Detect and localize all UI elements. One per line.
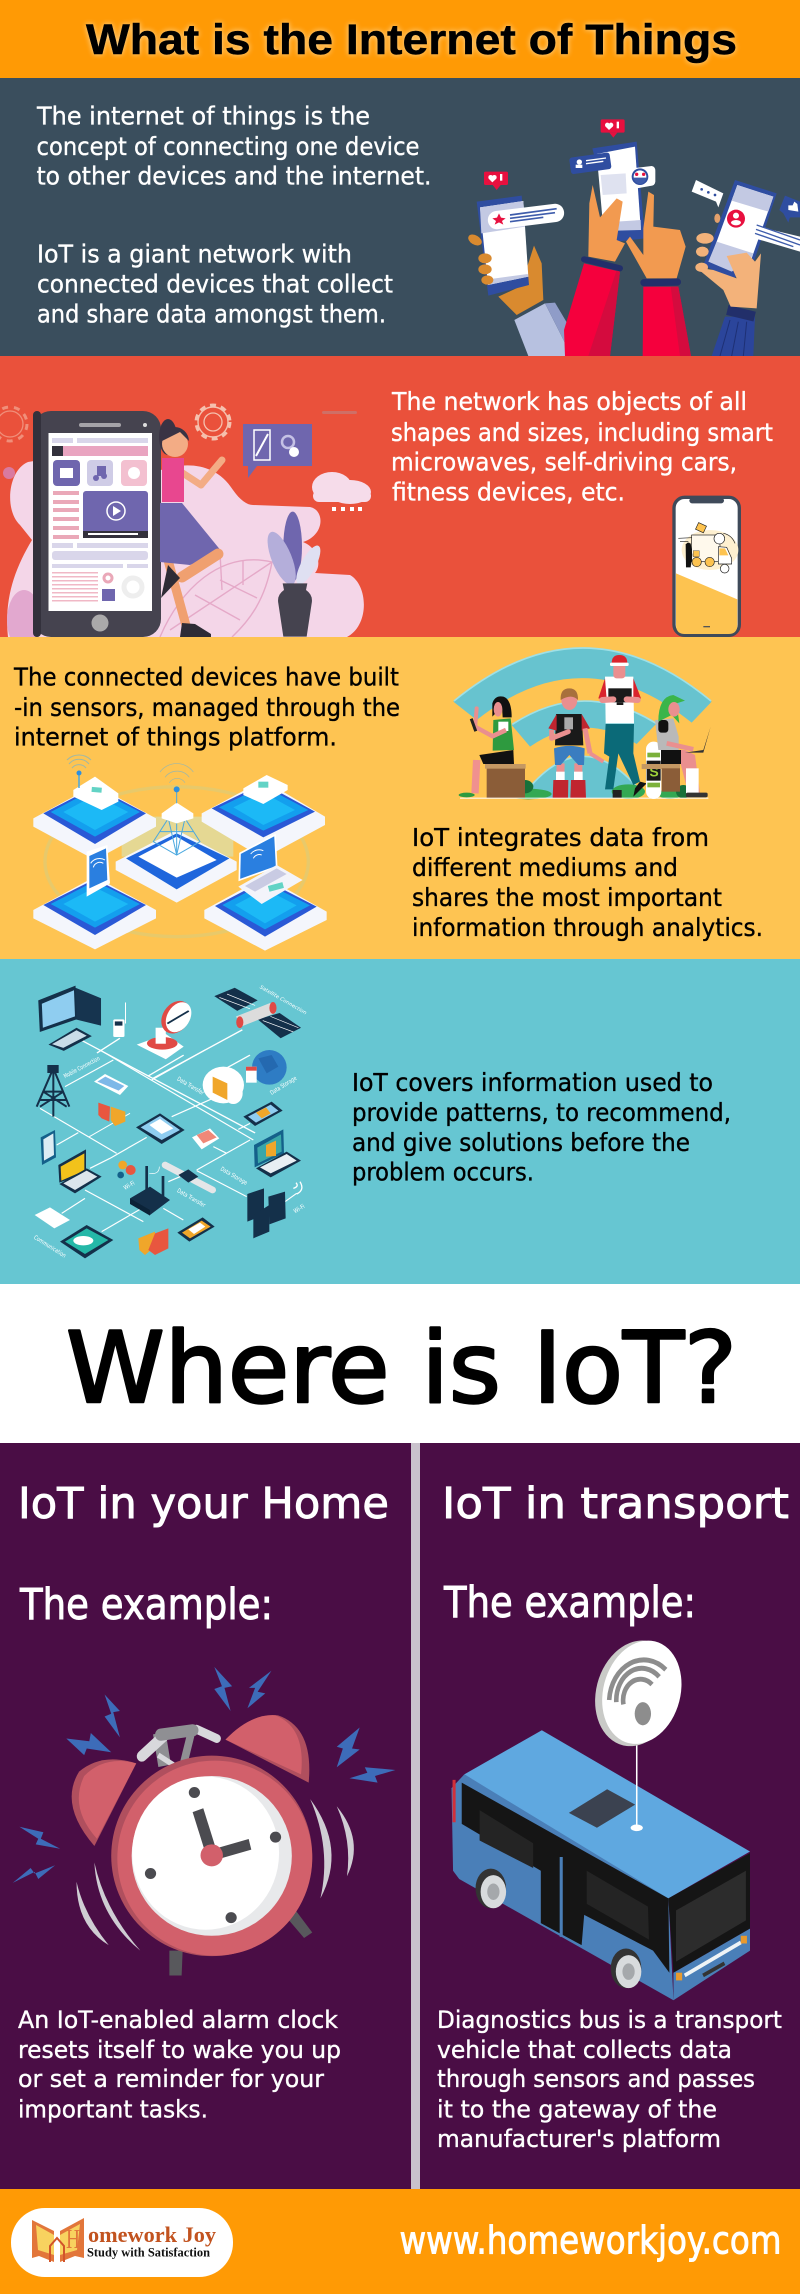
panel: sensors and analytics [0,637,800,959]
text block: network objects: The network has objects of all [391,387,747,416]
standing boy with tablet [598,655,647,798]
seated boy with phone [548,688,603,798]
text block: IoT concept: and share data amongst them. [37,300,386,328]
clock face [111,1756,312,1956]
pink blobs [7,460,364,637]
desktop computer [38,986,101,1051]
potted plant [262,512,325,637]
envelope [35,1207,70,1228]
illustration: people on wifi symbol [453,648,712,799]
phone with contact [94,1074,128,1095]
top heart bubble [601,119,625,138]
smartwatch [165,1165,213,1190]
small phone right [243,1102,283,1126]
bus body [452,1730,750,2000]
platform top right [202,775,325,858]
icon: open book house: H [66,2224,80,2254]
lightning bolts [13,1667,395,1883]
satellite [214,988,301,1038]
router [130,1166,170,1216]
platform bottom left [33,877,156,949]
text block: alarm clock: An IoT-enabled alarm clock [18,2006,338,2034]
wifi router [113,1002,126,1037]
text block: IoT concept: connected devices that collect [37,270,393,298]
illustration: hands holding phones [466,119,800,356]
wifi symbols [91,850,263,867]
wheels [476,1869,641,1988]
text block: diagnostics bus: vehicle that collects data [437,2036,732,2064]
connection lines [40,1050,297,1232]
text block: alarm clock: or set a reminder for your [18,2065,324,2093]
illustration: ringing alarm clock [13,1667,395,1975]
handle and bells [72,1715,309,1846]
laptop device [238,835,303,904]
phone bottom [177,1217,215,1242]
column headings [18,1479,789,1630]
text block: IoT concept: The internet of things is the [36,102,370,130]
cloud with folder [203,1067,244,1104]
chat bubbles orange [138,1228,168,1255]
tower [37,1066,69,1117]
vibration arcs [77,1799,354,1951]
small labels: Data Transfer [176,1076,205,1097]
tablet [136,1113,185,1144]
header bar [0,0,800,78]
seated girl with laptop [642,695,711,797]
left hand and phone [466,172,565,315]
panel: patterns and solutions [0,959,800,1284]
skateboard [646,742,661,799]
text block: IoT concept: to other devices and the internet. [36,162,432,190]
column headings: IoT in transport [442,1479,789,1529]
left sleeve [514,303,587,356]
logo [11,2208,233,2277]
platform bottom right [204,877,327,951]
wifi arcs [453,648,712,798]
text block: built-in sensors [13,662,400,752]
text block: alarm clock: important tasks. [18,2096,208,2124]
column headings: The example: [443,1578,696,1628]
text block: IoT concept: concept of connecting one device [36,132,420,161]
text block: diagnostics bus: manufacturer's platform [437,2125,721,2153]
panel: what is IoT [0,78,800,356]
small labels: Data Storage [269,1075,298,1097]
column headings: IoT in your Home [18,1479,389,1529]
panel: IoT examples [0,1443,800,2189]
column headings: The example: [19,1580,273,1630]
text block: alarm clock [18,2006,341,2124]
text block: diagnostics bus [437,2006,782,2153]
illustration: girl beside giant phone [0,405,371,650]
text block: IoT covers information: problem occurs. [352,1158,534,1186]
text block: built-in sensors: The connected devices have built [13,662,399,692]
text block: diagnostics bus: Diagnostics bus is a transport [437,2006,782,2034]
text block: integrates data: IoT integrates data from [412,823,709,852]
logo: omework Joy [88,2222,216,2247]
text block: integrates data: shares the most important [412,883,722,912]
small labels: Data Storage [219,1166,249,1187]
text block: built-in sensors: -in sensors, managed through the [14,693,400,722]
small labels: Wi-Fi [122,1180,136,1192]
gears and small shapes [0,407,27,441]
text block: IoT concept [36,102,432,328]
text block: IoT covers information: provide patterns, to recommend, [352,1098,731,1127]
stack of documents [192,1128,219,1149]
seated girl with phone [459,696,526,798]
platform center with tower [116,786,237,903]
leaf outlines [160,553,272,637]
chat bubbles red [98,1103,125,1126]
footer bar [0,2189,800,2294]
laptop right [254,1129,301,1177]
antenna over left router [67,755,91,788]
text block: IoT covers information: and give solutions before the [352,1128,690,1157]
small labels: Communication [32,1234,67,1260]
tablet bottom [60,1225,113,1258]
laptop yellow [58,1149,102,1193]
illustration: connected device network upper [38,985,308,1133]
icon: open book house [32,2218,84,2262]
text block: network objects: fitness devices, etc. [392,478,625,506]
logo: Study with Satisfaction [87,2246,210,2260]
title: What is the Internet of Things [86,16,737,64]
panel: network objects [0,356,800,650]
small labels: Data Transfer [176,1187,207,1209]
illustration: connected device network lower [32,1050,306,1260]
satellite dish [137,998,196,1059]
bushes [505,780,691,799]
servers [247,1188,286,1238]
text block: IoT concept: IoT is a giant network with [37,240,352,268]
skateboard: S [649,764,659,780]
wifi sign on pin [582,1628,695,1831]
cloud [312,472,371,511]
small label: Satellite Connection [258,985,308,1016]
text block: network objects: microwaves, self-driving cars, [391,448,737,476]
right hand and phone [692,180,800,356]
text block: diagnostics bus: it to the gateway of the [437,2096,717,2124]
text block: alarm clock: resets itself to wake you up [18,2036,341,2064]
text block: IoT covers information [352,1068,731,1186]
heading band: where is IoT [0,1284,800,1443]
phone left [41,1130,56,1165]
wifi arcs [149,1167,302,1194]
text block: IoT covers information: IoT covers information used to [352,1068,713,1097]
gears [117,1161,136,1178]
text block: integrates data: information through analytics. [412,913,763,942]
small labels: Wi-Fi [292,1203,306,1215]
text block: integrates data: different mediums and [412,853,678,882]
text block: network objects [391,387,773,506]
platform top left [33,777,156,860]
middle hands and phone [564,142,691,356]
text block: built-in sensors: internet of things platform. [14,722,337,752]
giant phone [33,411,161,637]
legs [169,1909,312,1975]
chat bubble with phone and gear [243,424,312,478]
heading: Where is IoT? [66,1312,737,1426]
text block: integrates data [412,823,763,942]
globe and calendar [246,1050,287,1085]
illustration: isometric device platforms [33,764,327,951]
text block: diagnostics bus: through sensors and passes [437,2065,755,2093]
small labels: Mobile Connection [63,1055,101,1080]
illustration: small smartphone with truck [674,497,739,635]
small labels [32,1055,306,1260]
girl [159,419,222,640]
phone device [87,845,110,897]
illustration: diagnostics bus [452,1628,750,2000]
